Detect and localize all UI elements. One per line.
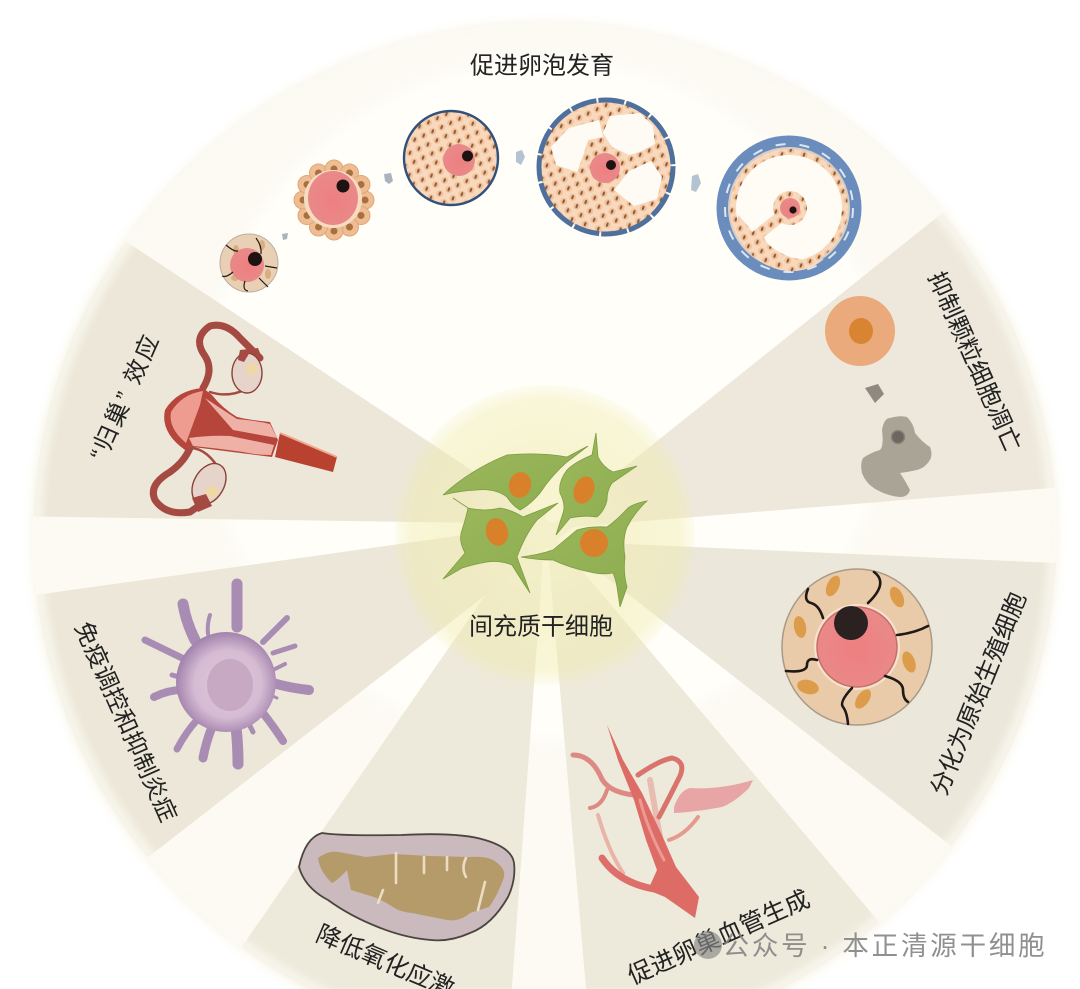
arrow: follicle step 4 [691,174,701,192]
watermark: 公众号 · 本正清源干细胞 [723,931,1047,961]
sector: oxidative stress [244,560,542,989]
icon: early antral follicle [539,100,673,234]
icon: uterus and ovaries [153,325,337,513]
arrow: apoptosis [865,384,884,403]
sector: angiogenesis [549,560,876,989]
label: homing effect: “归巢” 效应 [85,331,165,465]
arrow: follicle step 1 [282,233,288,240]
icon: secondary follicle [404,111,498,205]
label: mesenchymal stem cells: 间充质干细胞 [469,614,613,640]
radial sectors [34,216,1052,989]
label: inhibit granulosa apoptosis: 抑制颗粒细胞凋亡 [922,268,1026,456]
cell 2 [556,433,637,535]
label: promote ovarian angiogenesis: 促进卵巢血管生成 [624,885,814,989]
arrow: follicle step 3 [516,150,525,165]
cell 3 [443,498,558,593]
icon: mesenchymal stem cells [443,433,647,607]
icon: healthy granulosa cell [825,296,895,366]
arrow: follicle step 2 [384,173,393,184]
label: immune regulation: 免疫调控和抑制炎症 [69,618,181,826]
icon: primordial germ cell [782,569,932,725]
cell 1 [443,446,588,510]
icon: mitochondrion [299,833,514,940]
icon: primary follicle [294,160,374,240]
title: promote follicle development: 促进卵泡发育 [470,52,614,80]
icon: mature follicle [719,138,859,278]
icon: apoptotic cell [861,416,932,497]
sector: inhibit granulosa apoptosis [570,216,1050,526]
cell 4 [521,501,647,607]
icon: primordial follicle [220,234,278,292]
label: differentiate into germ cells: 分化为原始生殖细胞 [926,589,1032,799]
sector: homing effect [34,242,534,522]
icon: immune cell [145,584,309,764]
central glow circle [395,385,695,685]
sector: differentiation [604,544,1052,844]
sector: immune [37,527,572,857]
icon: blood vessels [573,725,753,918]
